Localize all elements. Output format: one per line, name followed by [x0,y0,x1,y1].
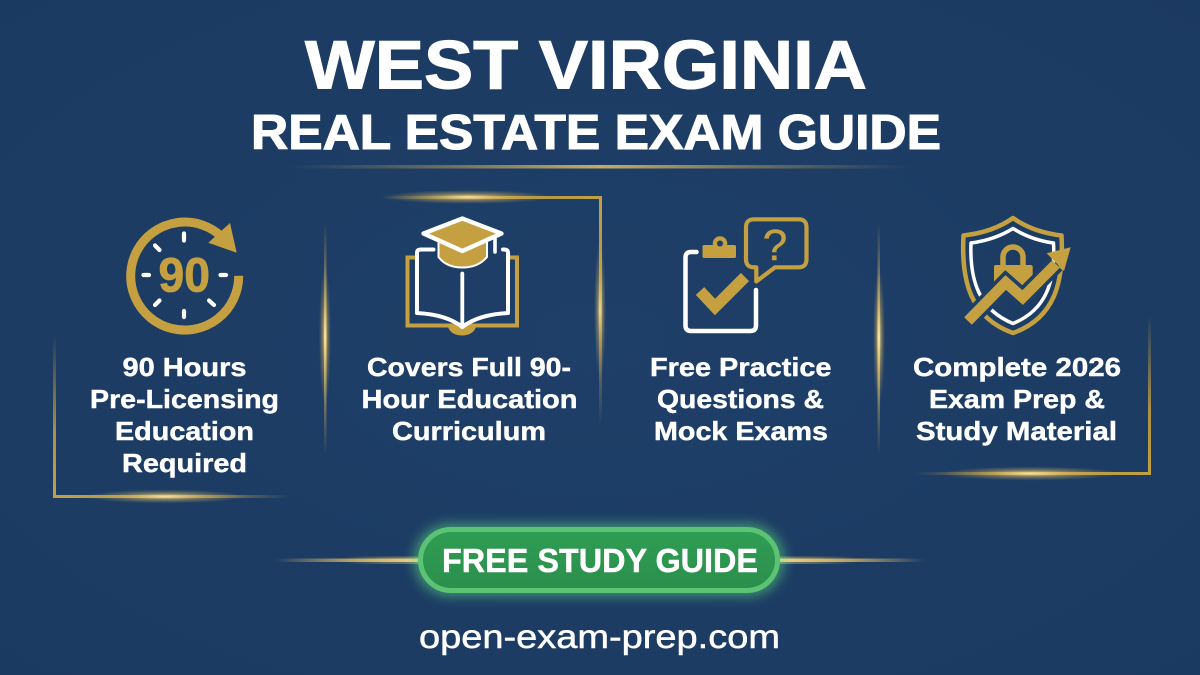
text: covers full curriculum [362,352,578,446]
icon: book and graduation cap [408,218,517,336]
text: free practice questions: Free Practice [650,352,832,382]
text: 90 hours pre-licensing: Pre-Licensing [90,384,279,414]
text: 90 hours pre-licensing: 90 Hours [122,352,246,382]
title [251,26,941,160]
divider: between features three and four [873,222,885,456]
title line: West Virginia: WEST VIRGINIA [305,26,867,104]
button accent line: left [275,556,420,564]
text: covers full curriculum: Covers Full 90- [367,352,571,382]
text: 90 hours pre-licensing: Education [115,416,254,446]
panel: curriculum [362,218,578,446]
divider: between features one and two [319,222,331,456]
subtitle line: Real Estate Exam Guide: REAL ESTATE EXAM GUIDE [251,105,941,160]
text: covers full curriculum: Curriculum [392,416,546,446]
text: complete exam prep [913,352,1121,446]
text: complete exam prep: Complete 2026 [913,352,1121,382]
text: covers full curriculum: Hour Education [362,384,578,414]
panel: 90 hours [90,222,279,478]
text: complete exam prep: Study Material [916,416,1117,446]
text: free practice questions: Questions & [657,384,824,414]
button accent line: right [780,556,925,564]
frame: first feature corner [53,335,290,504]
title underline [290,165,910,168]
frame: fourth feature corner [915,315,1151,480]
text: 90 hours pre-licensing [90,352,279,478]
text: complete exam prep: Exam Prep & [929,384,1105,414]
icon: 90 hour clock: 90 [158,250,210,302]
website url: open-exam-prep.com [419,618,780,655]
text: free practice questions [650,352,832,446]
panel: practice questions [650,219,832,446]
icon: clipboard and question bubble: ? [763,221,787,270]
panel: complete exam prep [913,218,1121,446]
text: 90 hours pre-licensing: Required [122,448,247,478]
button: free study guide: FREE STUDY GUIDE [442,542,758,579]
frame: second feature corner [380,190,606,426]
text: free practice questions: Mock Exams [654,416,828,446]
button: free study guide [414,524,784,596]
icon: clipboard and question bubble [686,219,806,331]
icon: 90 hour clock [131,222,239,330]
icon: shield with lock and growth arrow [963,218,1071,333]
